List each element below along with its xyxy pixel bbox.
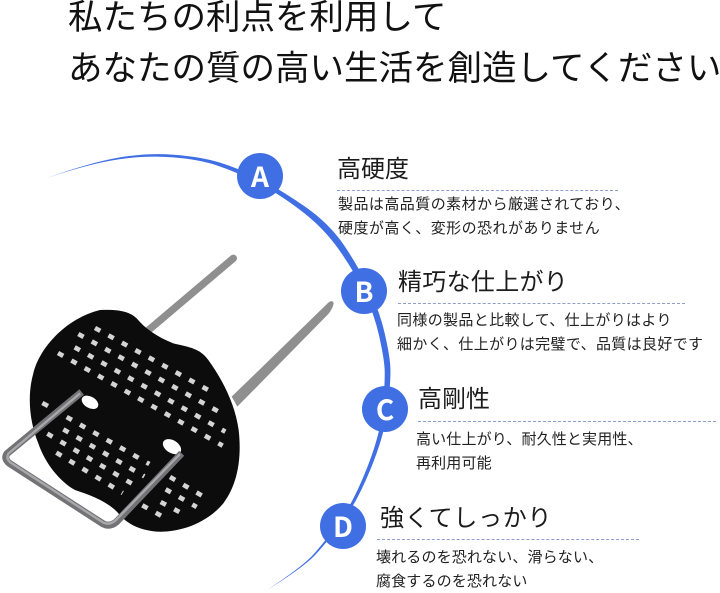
badge A [237, 153, 283, 199]
badge C [362, 386, 408, 432]
body C: 再利用可能 [416, 455, 492, 472]
black disc [30, 310, 240, 532]
body A: 製品は高品質の素材から厳選されており、 [338, 196, 630, 213]
badge A: A [251, 156, 269, 196]
divider B [398, 303, 685, 304]
rear stake one [147, 258, 233, 332]
item D [320, 503, 639, 590]
title [68, 0, 720, 88]
badge D: D [333, 506, 353, 546]
badge D [320, 503, 366, 549]
heading C: 高剛性 [418, 386, 490, 413]
item A [237, 153, 630, 237]
divider D [377, 539, 639, 540]
divider A [337, 190, 618, 191]
body C: 高い仕上がり、耐久性と実用性、 [416, 431, 643, 448]
disc perforations [42, 328, 225, 516]
body D: 壊れるのを恐れない、滑らない、 [376, 549, 603, 566]
title: 私たちの利点を利用して [68, 0, 446, 37]
body A: 硬度が高く、変形の恐れがありません [338, 220, 600, 237]
badge C: C [376, 389, 394, 429]
item C [362, 386, 716, 472]
rear stake two [232, 301, 334, 407]
body B [397, 312, 703, 353]
product illustration: black disc with metal stakes [2, 254, 334, 532]
item B [341, 268, 703, 353]
heading B: 精巧な仕上がり [398, 269, 568, 296]
body D [376, 549, 603, 590]
body B: 同様の製品と比較して、仕上がりはより [397, 312, 672, 329]
badge B [341, 268, 387, 314]
heading D: 強くてしっかり [380, 505, 552, 532]
body C [416, 431, 643, 472]
heading A: 高硬度 [337, 156, 409, 183]
body A [338, 196, 630, 237]
title: あなたの質の高い生活を創造してください [68, 50, 720, 88]
metal staple [6, 392, 182, 525]
badge B: B [354, 271, 374, 311]
divider C [418, 421, 716, 422]
body D: 腐食するのを恐れない [376, 573, 528, 590]
body B: 細かく、仕上がりは完璧で、品質は良好です [397, 336, 703, 353]
slot holes [79, 393, 101, 412]
